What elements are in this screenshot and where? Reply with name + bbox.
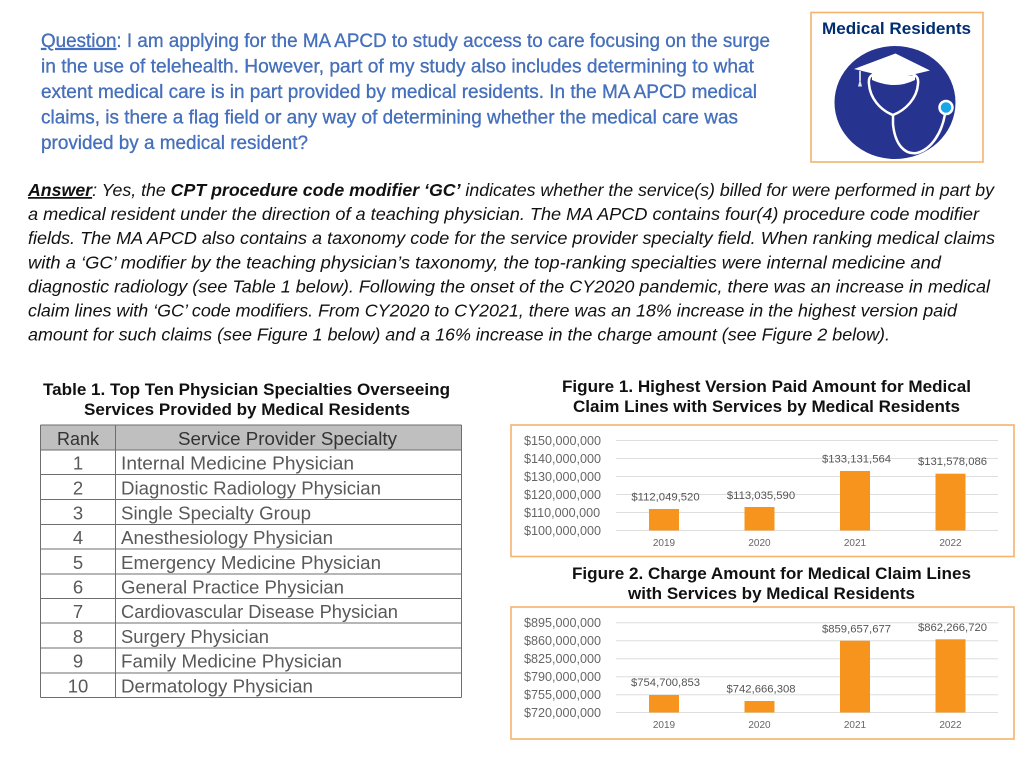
table 1 title: [43, 380, 450, 419]
table 1: physician specialties: Diagnostic Radiology Physician: [121, 478, 381, 498]
table 1: physician specialties: 8: [73, 626, 83, 647]
table 1: physician specialties: 6: [73, 576, 83, 598]
table 1: physician specialties: 1: [73, 452, 83, 474]
figure 2 bar chart: 2022: [939, 720, 962, 731]
figure 2 bar chart: $755,000,000: [524, 688, 601, 702]
table 1 title: Table 1. Top Ten Physician Specialties Overseeing: [43, 380, 450, 399]
logo panel: medical residents: Medical Residents: [822, 19, 971, 38]
table 1: physician specialties: 3: [73, 502, 83, 524]
figure 1 bar chart: $140,000,000: [524, 452, 601, 466]
figure 2 bar chart: $895,000,000: [524, 616, 601, 630]
table 1: physician specialties: Internal Medicine Physician: [121, 452, 354, 474]
figure 2 bar chart: 2019: [653, 720, 676, 731]
table 1: physician specialties: 9: [73, 650, 83, 672]
figure 2 bar chart: $790,000,000: [524, 670, 601, 684]
table 1: physician specialties: 7: [73, 601, 83, 622]
figure 1 bar chart: $112,049,520: [631, 492, 700, 504]
icon: graduation cap and stethoscope: [834, 46, 956, 159]
table 1: physician specialties: [40, 425, 462, 698]
figure 1 title: Claim Lines with Services by Medical Residents: [573, 397, 960, 416]
table 1: physician specialties: Dermatology Physician: [121, 676, 313, 696]
figure 2 bar chart: $754,700,853: [631, 677, 700, 689]
figure 1 bar chart: $130,000,000: [524, 470, 601, 484]
figure 2 bar chart: $720,000,000: [524, 706, 601, 720]
answer text block: Answer: Yes, the CPT procedure code modifier ‘GC’ indicates whether the service(s) billed for were performed in part by: [27, 180, 995, 200]
answer text block: claim lines with ‘GC’ code modifiers. From CY2020 to CY2021, there was an 18% increase in the highest version paid: [28, 300, 958, 320]
answer text block: [27, 180, 995, 344]
answer text block: amount for such claims (see Figure 1 below) and a 16% increase in the charge amount (see Figure 2 below).: [28, 324, 890, 344]
figure 2 bar chart: $859,657,677: [822, 624, 891, 636]
figure 1 title: Figure 1. Highest Version Paid Amount for Medical: [562, 377, 971, 396]
answer text block: diagnostic radiology (see Table 1 below). Following the onset of the CY2020 pandemic, there was an increase in medical: [28, 276, 991, 296]
figure 1 bar chart: $131,578,086: [918, 456, 987, 468]
figure 2 bar chart: [511, 607, 1014, 739]
figure 2 bar chart: $860,000,000: [524, 634, 601, 648]
table 1: physician specialties: 10: [68, 676, 88, 696]
figure 1 bar chart: 2020: [748, 538, 771, 549]
figure 1 bar chart: $133,131,564: [822, 454, 891, 466]
figure 2 bar chart: $825,000,000: [524, 652, 601, 666]
logo panel: medical residents: [811, 12, 983, 162]
figure 1 bar chart: $113,035,590: [727, 490, 795, 502]
answer text block: fields. The MA APCD also contains a taxonomy code for the service provider specialty field. When ranking medical claims: [28, 228, 995, 248]
figure 2 bar chart: $742,666,308: [726, 684, 796, 696]
question text block: claims, is there a flag field or any way of determining whether the medical care was: [41, 106, 738, 128]
table 1 title: Services Provided by Medical Residents: [84, 400, 410, 419]
figure 1 bar chart: 2021: [844, 538, 867, 549]
figure 2 title: with Services by Medical Residents: [627, 584, 915, 603]
figure 1 bar chart: $150,000,000: [524, 434, 601, 448]
table 1: physician specialties: Rank: [57, 428, 100, 449]
table 1: physician specialties: Family Medicine Physician: [121, 650, 342, 672]
question text block: in the use of telehealth. However, part of my study also includes determining to what: [41, 56, 755, 78]
figure 1 bar chart: [511, 425, 1014, 556]
table 1: physician specialties: 2: [73, 478, 83, 498]
figure 1 bar chart: $120,000,000: [524, 488, 601, 502]
question text block: extent medical care is in part provided by medical residents. In the MA APCD medical: [41, 81, 757, 103]
table 1: physician specialties: 5: [73, 552, 83, 573]
table 1: physician specialties: Anesthesiology Physician: [121, 527, 333, 548]
table 1: physician specialties: Emergency Medicine Physician: [121, 552, 381, 573]
figure 2 bar chart: $862,266,720: [918, 622, 987, 634]
question text block: provided by a medical resident?: [41, 132, 308, 154]
answer text block: with a ‘GC’ modifier by the teaching physician’s taxonomy, the top-ranking specialties were internal medicine and: [28, 252, 942, 272]
table 1: physician specialties: Surgery Physician: [121, 626, 269, 647]
figure 1 bar chart: 2022: [939, 538, 962, 549]
answer text block: a medical resident under the direction of a teaching physician. The MA APCD contains four(4) procedure code modifier: [28, 204, 980, 224]
figure 1 bar chart: $110,000,000: [524, 506, 600, 520]
question text block: Question: I am applying for the MA APCD to study access to care focusing on the surge: [41, 30, 770, 52]
figure 2 bar chart: 2020: [748, 720, 771, 731]
figure 2 title: [572, 564, 971, 603]
table 1: physician specialties: 4: [73, 527, 83, 548]
figure 2 title: Figure 2. Charge Amount for Medical Claim Lines: [572, 564, 971, 583]
table 1: physician specialties: Cardiovascular Disease Physician: [121, 601, 398, 622]
table 1: physician specialties: Service Provider Specialty: [178, 428, 398, 449]
figure 1 bar chart: $100,000,000: [524, 524, 601, 538]
table 1: physician specialties: Single Specialty Group: [121, 502, 311, 524]
question text block: [41, 30, 770, 154]
figure 1 title: [562, 377, 971, 416]
figure 1 bar chart: 2019: [653, 538, 676, 549]
figure 2 bar chart: 2021: [844, 720, 867, 731]
table 1: physician specialties: General Practice Physician: [121, 576, 344, 598]
